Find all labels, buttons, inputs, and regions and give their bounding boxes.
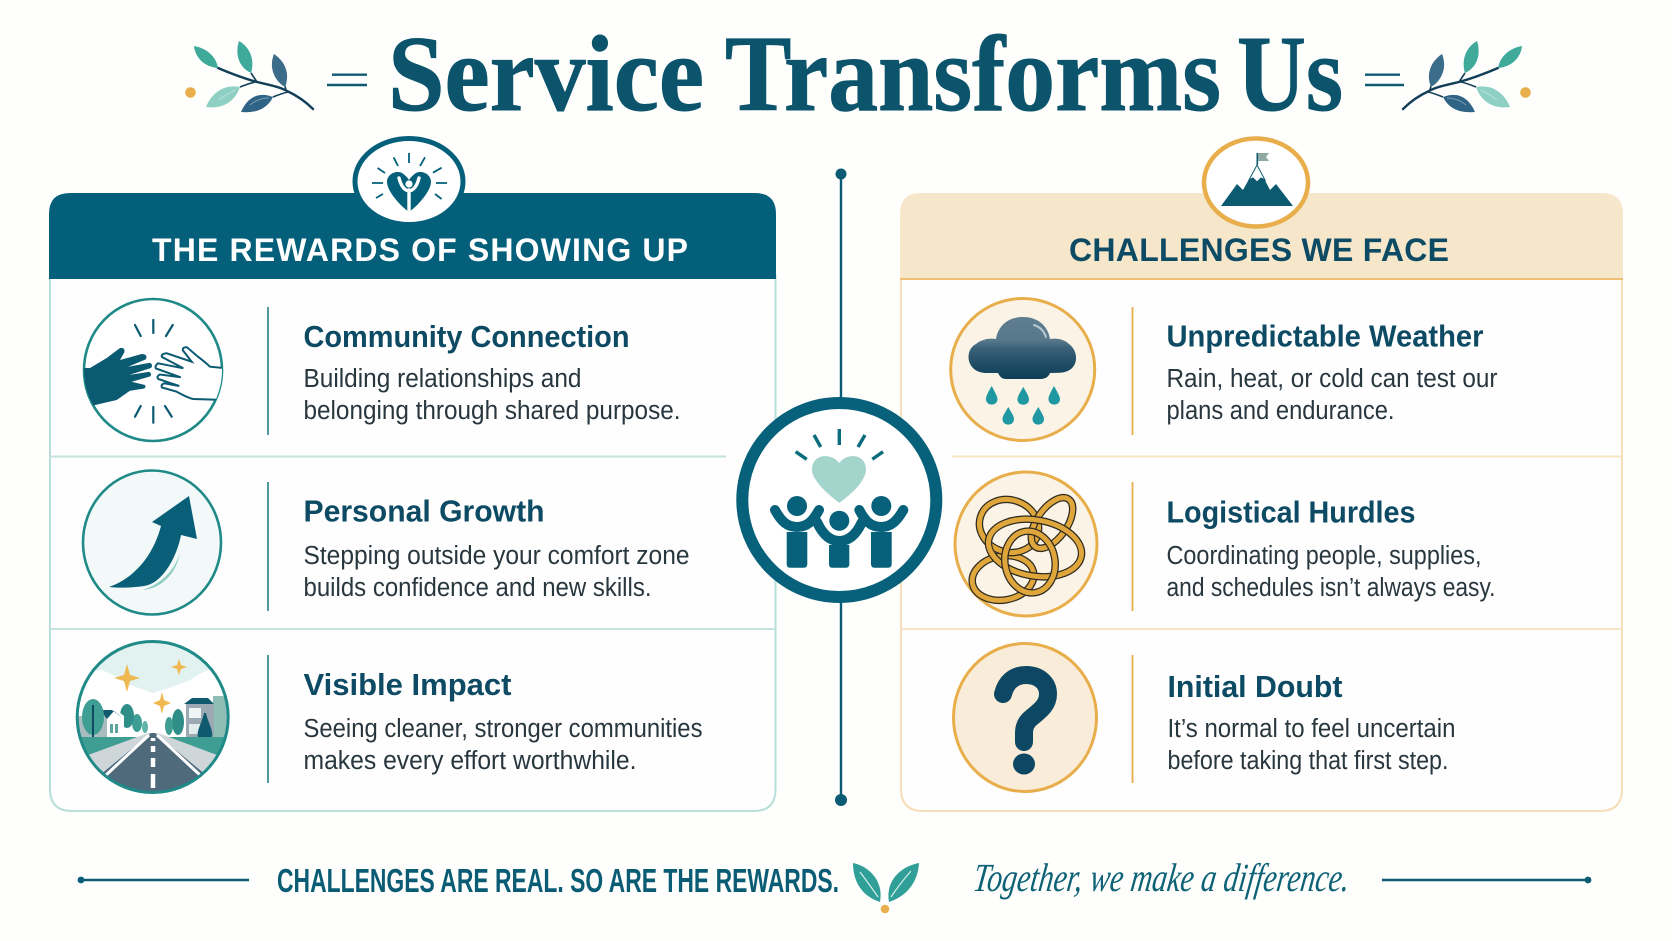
row: initial doubt [954, 644, 1456, 792]
footer [78, 855, 1591, 913]
title text: Us [1237, 15, 1343, 134]
row separator [1132, 655, 1134, 783]
panel header [900, 193, 1623, 279]
row separator [1132, 482, 1134, 611]
description: makes every effort worthwhile. [304, 747, 636, 775]
row dividers [50, 456, 775, 629]
row dividers [901, 456, 1622, 629]
rays [796, 429, 883, 459]
header medallion [1204, 138, 1308, 226]
description: Stepping outside your comfort zone [304, 542, 690, 570]
icon: tangled rope [955, 472, 1097, 616]
description: Coordinating people, supplies, [1166, 542, 1482, 570]
title text: Transforms [725, 15, 1221, 134]
row separator [267, 482, 269, 611]
header text: THE REWARDS OF SHOWING UP [152, 232, 688, 268]
row: unpredictable weather [951, 298, 1498, 440]
description: belonging through shared purpose. [304, 397, 680, 425]
row separator [267, 655, 269, 783]
title text: Service [388, 15, 704, 134]
panel body [50, 275, 776, 811]
center medallion: people and heart [742, 403, 936, 597]
description: It’s normal to feel uncertain [1168, 715, 1456, 743]
row: logistical hurdles [955, 472, 1496, 616]
tagline: CHALLENGES ARE REAL. SO ARE THE REWARDS. [277, 862, 839, 899]
center vertical connector [835, 168, 847, 806]
row separator [267, 307, 269, 435]
icon: right sprig [1403, 41, 1531, 112]
description: Seeing cleaner, stronger communities [304, 715, 702, 743]
title [185, 15, 1531, 134]
row: personal growth [83, 470, 690, 614]
icon: hands [80, 299, 226, 441]
people [775, 496, 903, 568]
description: before taking that first step. [1168, 747, 1448, 775]
right title rule [1365, 75, 1404, 85]
left title rule [327, 75, 367, 85]
icon: question mark [954, 644, 1096, 792]
panel header [49, 193, 776, 279]
description: plans and endurance. [1166, 397, 1394, 425]
panel: rewards [49, 138, 776, 811]
heading: Initial Doubt [1168, 669, 1342, 704]
panel body [901, 275, 1622, 811]
row separator [1132, 307, 1134, 435]
heading: Unpredictable Weather [1166, 318, 1484, 354]
icon: growth arrow [83, 470, 221, 614]
icon: rain cloud [951, 298, 1095, 440]
script slogan: Together, we make a difference. [971, 855, 1353, 900]
icon: neighborhood road [76, 640, 230, 794]
heart [812, 456, 866, 503]
description: builds confidence and new skills. [304, 574, 652, 602]
left rule [78, 877, 249, 883]
description: and schedules isn’t always easy. [1166, 574, 1496, 602]
heading: Visible Impact [304, 667, 512, 702]
heading: Personal Growth [304, 494, 544, 528]
panel: challenges [900, 138, 1623, 811]
description: Rain, heat, or cold can test our [1166, 365, 1498, 393]
row: community connection [80, 299, 680, 441]
heading: Community Connection [304, 319, 630, 354]
icon: left sprig [185, 41, 313, 112]
row: visible impact [70, 640, 702, 800]
heading: Logistical Hurdles [1166, 494, 1416, 530]
header medallion [355, 138, 463, 224]
icon: two leaves [853, 863, 919, 913]
right rule [1382, 877, 1591, 883]
header text: CHALLENGES WE FACE [1069, 232, 1449, 268]
description: Building relationships and [304, 365, 582, 393]
